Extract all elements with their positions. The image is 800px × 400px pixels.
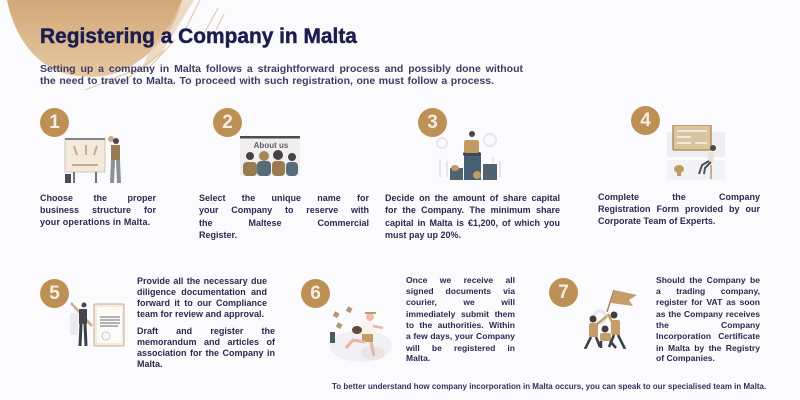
step 1 text: business structure for bbox=[40, 205, 156, 215]
step 7 text bbox=[656, 275, 760, 363]
step 1 bbox=[40, 108, 156, 227]
step 2 bbox=[199, 108, 369, 240]
step 5 text: team for review and approval. bbox=[137, 309, 264, 319]
step 2 text: your Company to reserve with bbox=[199, 205, 369, 215]
step 6 text: a few days, your Company bbox=[406, 331, 515, 341]
step 4 bbox=[598, 106, 760, 226]
step 6 text: signed documents via bbox=[406, 286, 515, 296]
icon: share capital bbox=[436, 131, 501, 180]
step 6 text: immediately submit them bbox=[406, 308, 515, 318]
step 4 text: Corporate Team of Experts. bbox=[598, 216, 715, 226]
step 1 number bbox=[40, 108, 69, 137]
step 3 bbox=[385, 108, 560, 240]
step 2 text: the Maltese Commercial bbox=[199, 218, 369, 228]
text: Setting up a company in Malta follows a straightforward process and possibly done without bbox=[40, 63, 523, 75]
step 1 number: 1 bbox=[49, 112, 60, 133]
icon: document review bbox=[70, 302, 124, 346]
step 7 text: a trading company, bbox=[656, 286, 760, 296]
step 4 number: 4 bbox=[640, 110, 651, 131]
step 2 number: 2 bbox=[222, 112, 233, 133]
step 5 text bbox=[137, 276, 275, 369]
step 7 text: the Company bbox=[656, 320, 760, 330]
step 6 text bbox=[406, 275, 516, 363]
footer note: To better understand how company incorporation in Malta occurs, you can speak to our specialised team in Malta. bbox=[332, 382, 766, 391]
step 5 text: Draft and register the bbox=[137, 326, 275, 336]
step 4 text: Complete the Company bbox=[598, 192, 760, 202]
step 6 text: Once we receive all bbox=[406, 275, 515, 285]
title: Registering a Company in Malta bbox=[40, 25, 357, 48]
step 6 text: courier, we will bbox=[406, 297, 515, 307]
step 6 text: to the authorities. Within bbox=[406, 320, 515, 330]
step 7 text: Should the Company be bbox=[656, 275, 760, 285]
step 7 number bbox=[549, 278, 578, 307]
step 5 text: memorandum and articles of bbox=[137, 337, 275, 347]
step 7 text: in Malta by the Registry bbox=[656, 342, 760, 352]
step 4 text bbox=[598, 192, 760, 226]
step 7 text: as the Company receives bbox=[656, 308, 760, 318]
step 1 text: Choose the proper bbox=[40, 193, 156, 203]
step 5 text: forward it to our Compliance bbox=[137, 298, 267, 308]
step 5 bbox=[40, 276, 275, 369]
step 7 text: Incorporation Certificate bbox=[656, 331, 760, 341]
step 2 number bbox=[213, 108, 242, 137]
step 6 number bbox=[301, 279, 330, 308]
step 1 text bbox=[40, 193, 156, 227]
step 3 number: 3 bbox=[427, 112, 438, 133]
step 3 text: must pay up 20%. bbox=[385, 230, 461, 240]
brush stroke background bbox=[7, 0, 224, 90]
step 4 number bbox=[631, 106, 660, 135]
step 6 bbox=[301, 275, 516, 363]
step 1 text: your operations in Malta. bbox=[40, 217, 150, 227]
step 7 number: 7 bbox=[558, 282, 569, 303]
icon: registration form bbox=[667, 125, 725, 179]
intro text bbox=[40, 63, 523, 87]
step 3 text: for the Company. The minimum share bbox=[385, 205, 560, 215]
step 5 text: Provide all the necessary due bbox=[137, 276, 267, 286]
step 3 text: Decide on the amount of share capital bbox=[385, 193, 560, 203]
step 6 text: Malta. bbox=[406, 353, 430, 363]
step 6 number: 6 bbox=[310, 283, 321, 304]
step 6 text: will be registered in bbox=[406, 342, 515, 352]
step 2 text: Select the unique name for bbox=[199, 193, 369, 203]
step 3 text bbox=[385, 193, 560, 240]
step 2 text bbox=[199, 193, 369, 240]
step 5 number bbox=[40, 279, 69, 308]
step 7 text: of Companies. bbox=[656, 353, 715, 363]
icon: about us team: About us bbox=[254, 141, 289, 150]
icon: team with flag bbox=[584, 290, 637, 349]
step 5 text: diligence documentation and bbox=[137, 287, 267, 297]
step 2 text: Register. bbox=[199, 230, 237, 240]
step 3 number bbox=[418, 108, 447, 137]
text: the need to travel to Malta. To proceed with such registration, one must follow a process. bbox=[40, 75, 494, 87]
step 5 text: Malta. bbox=[137, 359, 163, 369]
icon: courier running bbox=[330, 306, 392, 362]
step 7 bbox=[549, 275, 760, 363]
icon: strategy board bbox=[64, 136, 121, 184]
icon: about us team bbox=[240, 136, 300, 176]
step 3 text: capital in Malta is €1,200, of which you bbox=[385, 218, 560, 228]
step 5 number: 5 bbox=[49, 283, 60, 304]
step 4 text: Registration Form provided by our bbox=[598, 204, 760, 214]
step 7 text: register for VAT as soon bbox=[656, 297, 760, 307]
step 5 text: association for the Company in bbox=[137, 348, 275, 358]
